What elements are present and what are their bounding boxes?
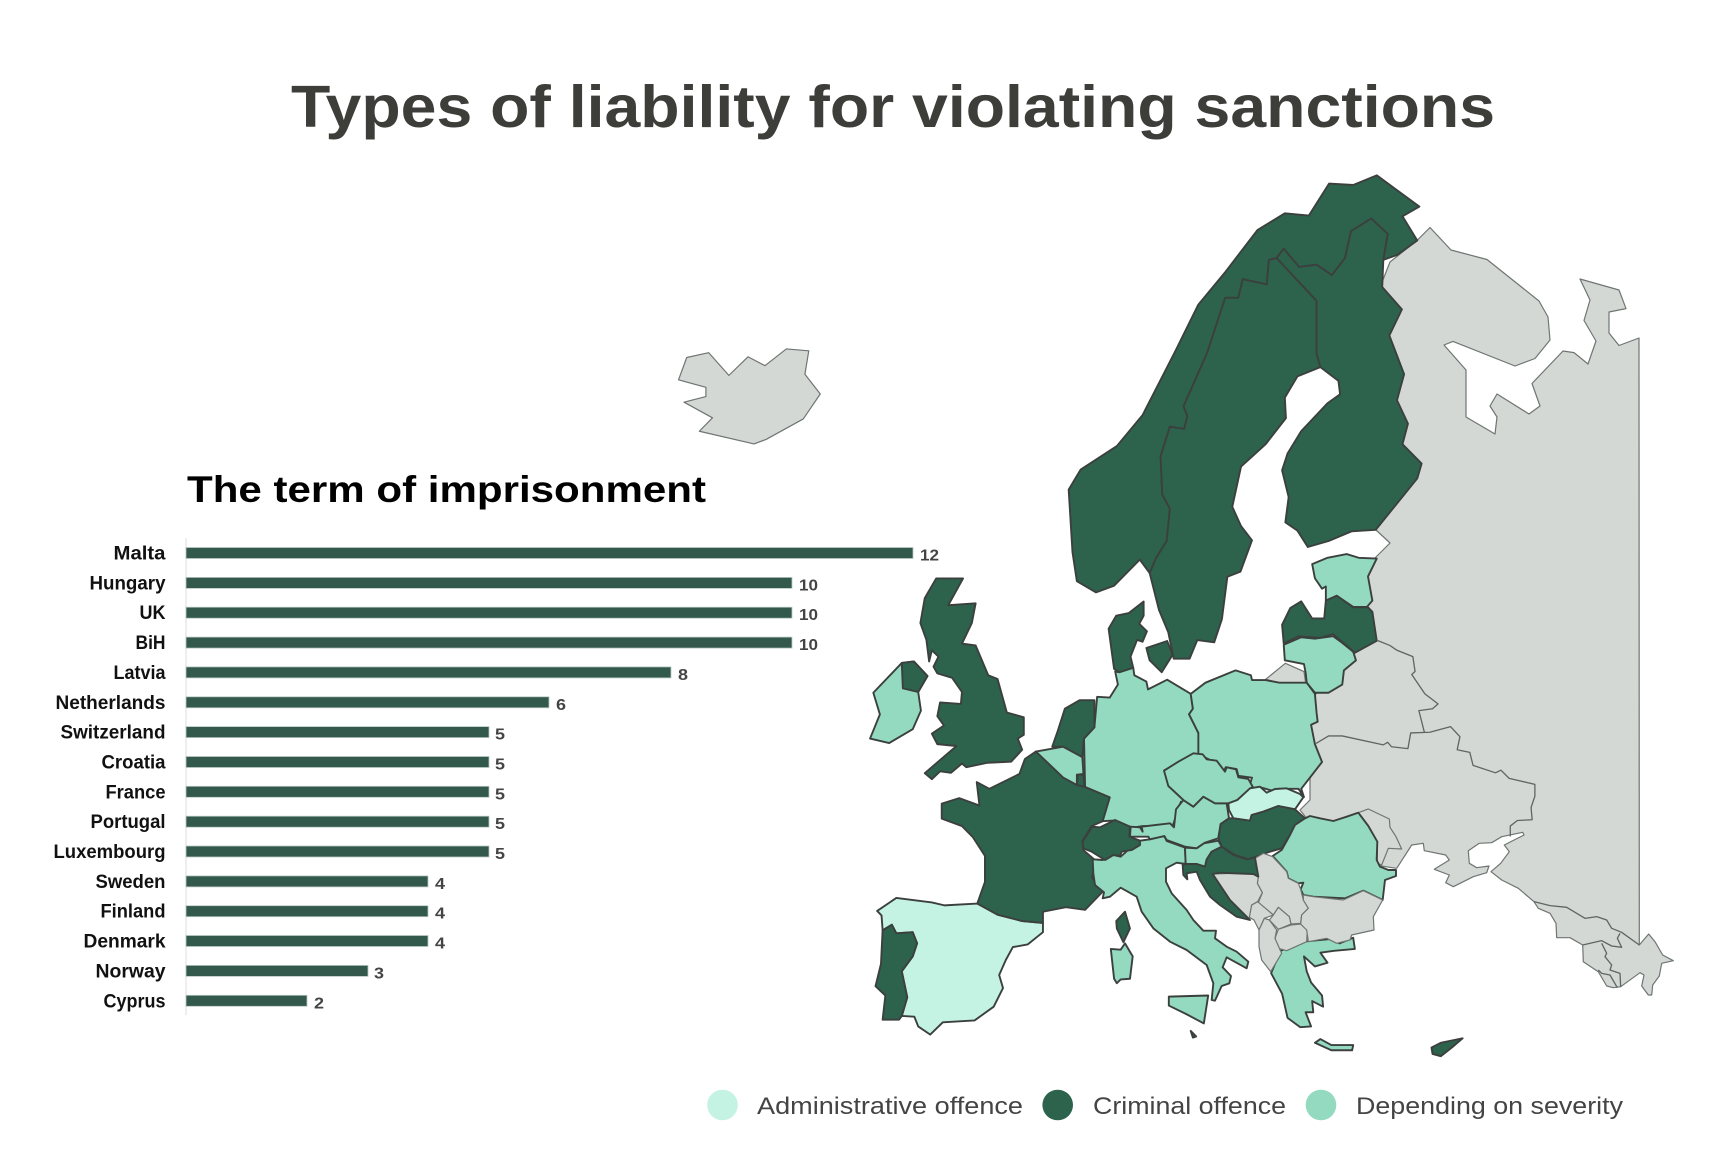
country: Montenegro: [1249, 902, 1273, 930]
row: UK: UK: [140, 603, 166, 624]
row: Finland: 4: [435, 906, 445, 923]
country: Bosnia and Herzegovina: [1213, 873, 1262, 920]
country: Cyprus: [1431, 1038, 1463, 1056]
country: Denmark: [1109, 602, 1147, 672]
row: Cyprus: [104, 991, 324, 1012]
row: Finland: Finland: [100, 902, 166, 923]
row: France: 5: [495, 786, 505, 803]
borders of eastern countries: [1266, 641, 1535, 836]
chart heading: The term of imprisonment: [187, 469, 706, 510]
border: Caucasus countries: [1534, 902, 1639, 988]
country: Slovakia: [1228, 787, 1303, 821]
row: Latvia: [114, 663, 688, 684]
country: Croatia: [1183, 847, 1258, 920]
row: Netherlands: [56, 693, 566, 714]
row: Luxembourg: Luxembourg: [54, 842, 166, 863]
island: Sicily: [1169, 996, 1208, 1023]
row: Sweden: [96, 872, 445, 893]
row: Norway: [96, 961, 384, 982]
country: Latvia: [1282, 596, 1377, 653]
row: Switzerland: Switzerland: [60, 723, 166, 744]
country: Malta: [1191, 1031, 1196, 1038]
country: Northern Ireland: [902, 661, 927, 692]
western and central countries: [870, 578, 1463, 1056]
row: UK: 10: [799, 607, 818, 624]
map of Europe: [679, 175, 1673, 1056]
row: Netherlands: Netherlands: [56, 693, 166, 714]
country: United Kingdom: [920, 578, 1024, 779]
row: Croatia: 5: [495, 756, 505, 774]
row: Finland: [100, 902, 445, 923]
island: Sardinia: [1111, 943, 1133, 983]
row: Portugal: Portugal: [90, 812, 166, 833]
row: Switzerland: [60, 723, 505, 744]
row: Portugal: 5: [495, 816, 505, 833]
legend item: Criminal offence: [1042, 1090, 1286, 1120]
row: Latvia: Latvia: [114, 663, 166, 684]
row: France: France: [106, 782, 166, 803]
title: Types of liability for violating sanctions: [291, 74, 1495, 140]
country: Bulgaria: [1301, 891, 1383, 943]
row: Malta: 12: [920, 548, 939, 564]
row: Denmark: Denmark: [84, 932, 166, 952]
row: Croatia: Croatia: [102, 752, 166, 774]
row: Hungary: [90, 573, 818, 594]
row: France: [106, 782, 505, 803]
row: Cyprus: Cyprus: [104, 991, 166, 1012]
central and south-eastern countries: [1083, 753, 1402, 1001]
country: Czechia: [1164, 753, 1253, 807]
country: North Macedonia: [1275, 924, 1307, 951]
island: Crete: [1315, 1039, 1353, 1050]
row: Sweden: 4: [435, 876, 445, 893]
row: Norway: Norway: [96, 961, 166, 982]
row: Luxembourg: [54, 842, 505, 863]
row: Hungary: Hungary: [90, 573, 166, 594]
row: Norway: 3: [374, 965, 384, 982]
island: Zealand: [1146, 641, 1173, 672]
row: Luxembourg: 5: [495, 846, 505, 863]
row: Sweden: Sweden: [96, 872, 166, 893]
row: Cyprus: 2: [314, 995, 324, 1012]
legend item: Depending on severity: Depending on severity: [1356, 1093, 1623, 1120]
country: Sweden: [1150, 258, 1320, 659]
row: BiH: 10: [799, 637, 818, 654]
row: Netherlands: 6: [556, 697, 566, 714]
row: Switzerland: 5: [495, 727, 505, 744]
row: BiH: [136, 633, 818, 654]
row: Denmark: [84, 932, 445, 952]
row: Latvia: 8: [678, 667, 688, 684]
country: Austria: [1130, 797, 1229, 848]
country: Norway: [1069, 175, 1419, 592]
row: BiH: BiH: [136, 633, 166, 654]
border: Ukraine north and east: [1316, 727, 1535, 836]
legend: [707, 1090, 1623, 1120]
country: Spain: [877, 898, 1043, 1035]
country: Romania: [1273, 813, 1396, 900]
country: Kosovo: [1269, 907, 1291, 929]
country: Moldova: [1358, 809, 1402, 865]
legend item: Administrative offence: [707, 1090, 1023, 1120]
country: Germany: [1084, 668, 1200, 828]
country: Switzerland: [1083, 820, 1140, 860]
country: Portugal: [876, 925, 917, 1020]
row: Denmark: 4: [435, 936, 445, 952]
row: UK: [140, 603, 818, 624]
country: Finland: [1277, 219, 1422, 547]
northern countries: [1069, 175, 1422, 659]
legend item: Depending on severity: [1306, 1090, 1623, 1120]
island: Corsica: [1116, 912, 1130, 942]
chart: the term of imprisonment: [54, 469, 939, 1015]
row: Malta: [114, 544, 939, 564]
row: Hungary: 10: [799, 577, 818, 594]
country: Serbia: [1255, 853, 1308, 924]
country: Lithuania: [1284, 636, 1356, 693]
row: Malta: Malta: [114, 544, 166, 564]
country: Ireland: [870, 661, 927, 743]
country: Poland: [1189, 670, 1322, 797]
country: France: [942, 752, 1110, 923]
country: Netherlands: [1052, 700, 1094, 757]
country: Kaliningrad: [1266, 663, 1306, 683]
row: Croatia: [102, 752, 505, 774]
country: Iceland: [679, 349, 820, 444]
row: Portugal: [90, 812, 505, 833]
country: Slovenia: [1185, 841, 1222, 867]
country: Belgium: [1036, 747, 1083, 785]
region: non-EU eastern landmass (Russia, Belarus, Ukraine, Caucasus): [1300, 228, 1673, 995]
legend item: Administrative offence: Administrative offence: [757, 1093, 1023, 1120]
country: Estonia: [1312, 554, 1377, 607]
border: Belarus and Russia: [1378, 641, 1438, 732]
country: Italy: [1093, 836, 1248, 1001]
legend item: Criminal offence: Criminal offence: [1093, 1093, 1286, 1120]
country: Greece: [1271, 938, 1355, 1027]
country: Albania: [1259, 918, 1282, 972]
country: Luxembourg: [1077, 775, 1085, 787]
country: Hungary: [1218, 806, 1305, 859]
chart axis: [186, 538, 187, 1015]
